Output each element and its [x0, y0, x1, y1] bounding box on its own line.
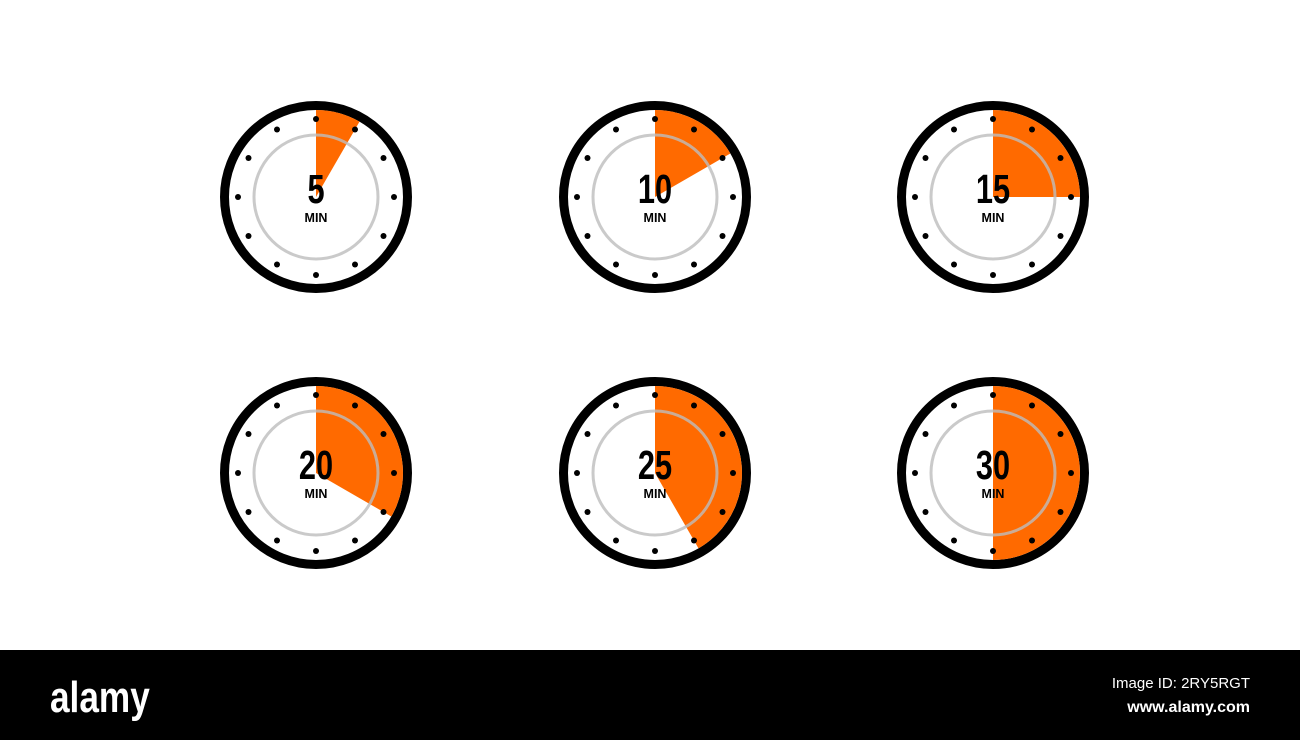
timer: 30 min: 30	[976, 442, 1010, 488]
timer: 15 min: MIN	[982, 211, 1004, 225]
timer: 15 min	[902, 106, 1084, 288]
logo: alamy: alamy	[50, 673, 150, 722]
website: www.alamy.com	[1126, 699, 1250, 716]
timer: 5 min	[224, 106, 408, 288]
timer: 10 min: 10	[638, 166, 672, 212]
timer: 5 min: MIN	[305, 211, 327, 225]
timer: 25 min: MIN	[644, 487, 666, 501]
timer: 30 min	[902, 382, 1084, 564]
timer: 20 min: MIN	[305, 487, 327, 501]
timer: 10 min: MIN	[644, 211, 666, 225]
timer: 20 min	[224, 382, 408, 564]
timer: 20 min: 20	[299, 442, 333, 488]
footer bar	[0, 650, 1300, 740]
timer: 30 min: MIN	[982, 487, 1004, 501]
timer: 5 min: 5	[307, 166, 325, 212]
timer: 25 min	[564, 382, 746, 564]
timer: 25 min: 25	[638, 442, 672, 488]
image id: Image ID: 2RY5RGT	[1112, 675, 1250, 692]
timer: 15 min: 15	[976, 166, 1010, 212]
timer: 10 min	[564, 106, 746, 288]
